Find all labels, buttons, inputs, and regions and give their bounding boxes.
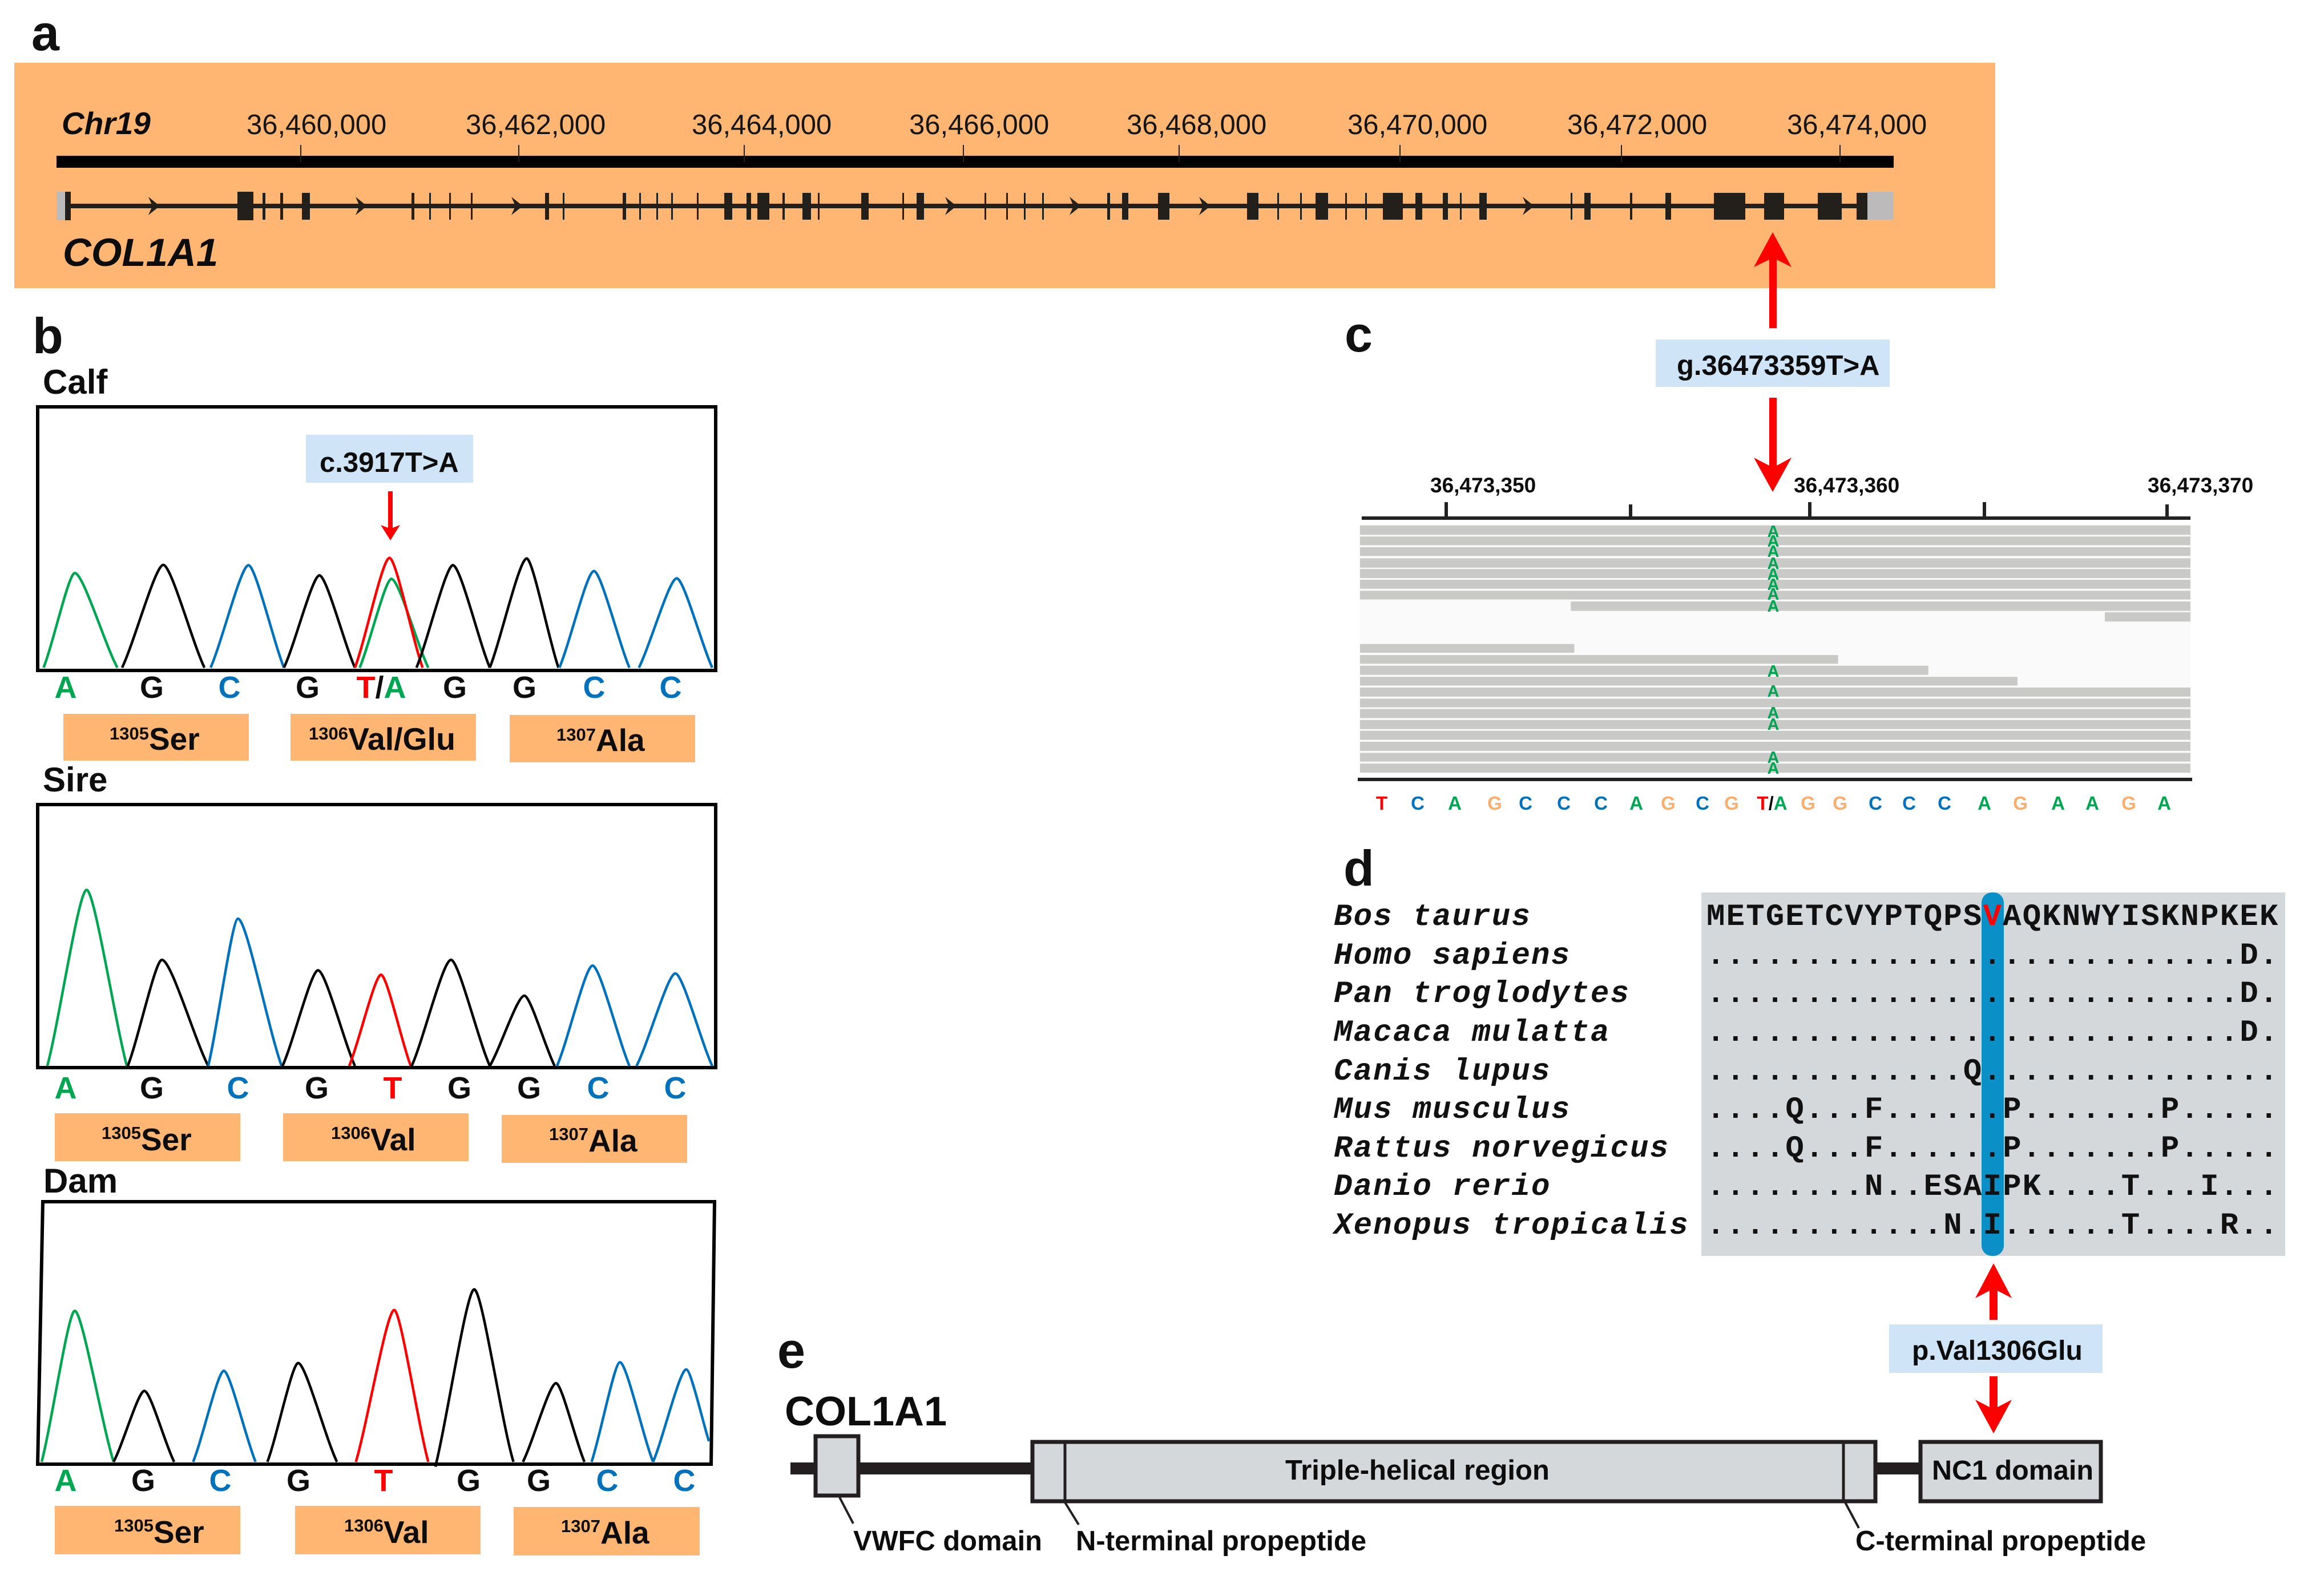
VWFC domain callout xyxy=(840,1497,1042,1557)
pileup axis xyxy=(1362,502,2190,518)
panel letter a: a xyxy=(31,5,60,61)
genomic position labels: 36,466,000 xyxy=(909,110,1049,140)
dam amino acids: Ala xyxy=(600,1515,649,1550)
reference sequence: G xyxy=(1801,793,1815,814)
sire amino acids: 1306 xyxy=(331,1123,370,1143)
reference sequence: T/A xyxy=(1757,793,1788,814)
variant allele marks: A xyxy=(1768,576,1780,594)
dam amino acids: Val xyxy=(384,1514,429,1550)
dam amino acids xyxy=(55,1506,700,1555)
calf amino acids: 1305 xyxy=(110,724,149,743)
calf chromatogram xyxy=(38,363,716,762)
arrow: protein variant to alignment xyxy=(1975,1263,2012,1320)
protein backbone xyxy=(790,1462,1919,1474)
species names xyxy=(1332,900,1689,1243)
reference sequence: C xyxy=(1938,793,1951,814)
panel c: read pileup xyxy=(1345,306,2253,814)
pileup coordinate labels xyxy=(1430,474,2253,497)
species names: Mus musculus xyxy=(1333,1093,1571,1128)
sire base calls xyxy=(55,1071,686,1105)
genomic position labels: 36,468,000 xyxy=(1127,110,1266,140)
pileup bottom rule xyxy=(1358,778,2192,781)
species names: Macaca mulatta xyxy=(1333,1016,1610,1050)
arrow: protein variant to NC1 domain xyxy=(1975,1376,2012,1433)
sire amino acids xyxy=(55,1113,687,1163)
reference sequence: A xyxy=(2085,793,2099,814)
aligned sequences: ...........................D. xyxy=(1706,939,2279,973)
variant allele marks: A xyxy=(1768,565,1780,584)
variant allele marks: A xyxy=(1768,759,1780,778)
dam base calls: C xyxy=(596,1464,619,1498)
calf base calls: A xyxy=(55,670,76,705)
callout: cDNA variant xyxy=(306,435,473,483)
reference sequence xyxy=(1376,793,2171,814)
protein name: COL1A1 xyxy=(785,1389,947,1435)
aligned sequences: ........N..ESAIPK....T...I... xyxy=(1706,1170,2279,1205)
reference sequence: C xyxy=(1696,793,1709,814)
pileup coordinate labels: 36,473,360 xyxy=(1794,474,1899,497)
species names: Rattus norvegicus xyxy=(1334,1132,1669,1166)
calf heading: Calf xyxy=(43,363,108,401)
variant allele marks: A xyxy=(1768,682,1780,701)
reference sequence: A xyxy=(1448,793,1462,814)
sire heading: Sire xyxy=(43,761,107,799)
dam base calls: C xyxy=(209,1464,232,1498)
reference sequence: C xyxy=(1519,793,1532,814)
dam base calls: C xyxy=(673,1464,695,1498)
calf base calls: C xyxy=(660,670,681,705)
C-terminal propeptide callout: C-terminal propeptide xyxy=(1855,1526,2146,1557)
aligned sequences: ....Q...F......P.......P..... xyxy=(1706,1132,2279,1166)
dam traces xyxy=(42,1290,709,1466)
sire base calls: T xyxy=(384,1071,402,1105)
dam base calls: A xyxy=(55,1464,76,1498)
pileup coordinate labels: 36,473,370 xyxy=(2148,474,2253,497)
sire amino acids: Val xyxy=(370,1122,415,1157)
sire trace frame xyxy=(38,805,716,1068)
reference sequence: C xyxy=(1594,793,1608,814)
calf base calls: C xyxy=(218,670,241,705)
triple-helical region box: Triple-helical region xyxy=(1285,1455,1550,1486)
panel e: protein domains xyxy=(777,1322,2146,1557)
arrow: variant peak xyxy=(381,491,400,540)
calf base calls: G xyxy=(140,670,164,705)
reference sequence: A xyxy=(2157,793,2171,814)
dam base calls xyxy=(55,1464,695,1498)
calf traces xyxy=(43,558,712,668)
genomic position labels xyxy=(247,110,1927,140)
sire base calls: C xyxy=(227,1071,249,1105)
sire base calls: G xyxy=(447,1071,471,1105)
arrow: variant to read pileup xyxy=(1754,398,1792,492)
reference sequence: A xyxy=(1629,793,1643,814)
sire amino acids: 1305 xyxy=(102,1123,141,1143)
reference sequence: C xyxy=(1411,793,1425,814)
variant allele marks: A xyxy=(1768,749,1780,767)
dam trace frame xyxy=(38,1202,715,1464)
sire base calls: G xyxy=(305,1071,329,1105)
panel letter d: d xyxy=(1343,840,1374,896)
VWFC domain box xyxy=(816,1436,858,1496)
callout: cDNA variant: c.3917T>A xyxy=(320,447,459,478)
callout: protein variant xyxy=(1889,1324,2103,1373)
calf amino acids xyxy=(63,714,695,762)
gene name: COL1A1 xyxy=(63,231,218,274)
calf base calls: G xyxy=(296,670,320,705)
reference sequence: C xyxy=(1557,793,1571,814)
sire amino acids: 1307 xyxy=(549,1124,588,1144)
reference sequence: G xyxy=(2121,793,2136,814)
variant allele marks: A xyxy=(1768,716,1780,734)
dam amino acids: 1306 xyxy=(344,1516,384,1535)
sire base calls: C xyxy=(587,1071,610,1105)
dam amino acids: 1305 xyxy=(114,1516,154,1535)
C-terminal propeptide callout xyxy=(1845,1502,2146,1557)
reference sequence: G xyxy=(2013,793,2028,814)
calf base calls: G xyxy=(443,670,467,705)
panel letter b: b xyxy=(33,308,63,364)
sire chromatogram xyxy=(38,761,716,1163)
orange background xyxy=(14,63,1995,288)
species names: Danio rerio xyxy=(1334,1170,1551,1205)
pileup coordinate labels: 36,473,350 xyxy=(1430,474,1536,497)
calf amino acids: 1306 xyxy=(309,724,348,743)
dam base calls: G xyxy=(457,1464,481,1498)
callout: genomic variant: g.36473359T>A xyxy=(1677,350,1880,381)
variant allele marks: A xyxy=(1768,585,1780,604)
sire base calls: G xyxy=(140,1071,164,1105)
panel a: gene structure xyxy=(14,5,1995,288)
genomic position labels: 36,472,000 xyxy=(1567,110,1707,140)
reference sequence: G xyxy=(1833,793,1847,814)
genomic position labels: 36,464,000 xyxy=(692,110,832,140)
calf amino acids: 1307 xyxy=(556,725,596,745)
calf amino acids: Ser xyxy=(149,721,200,757)
aligned sequences xyxy=(1706,900,2279,1243)
variant allele marks: A xyxy=(1768,597,1780,616)
reference sequence: G xyxy=(1487,793,1502,814)
species names: Bos taurus xyxy=(1334,900,1531,935)
aligned sequences: ...........................D. xyxy=(1706,1016,2279,1050)
calf amino acids: Ala xyxy=(596,722,645,758)
callout: protein variant: p.Val1306Glu xyxy=(1912,1336,2083,1366)
genomic position labels: 36,470,000 xyxy=(1347,110,1487,140)
species names: Pan troglodytes xyxy=(1334,977,1630,1012)
variant allele marks: A xyxy=(1768,662,1780,681)
genomic position labels: 36,460,000 xyxy=(247,110,386,140)
reference sequence: G xyxy=(1724,793,1739,814)
aligned reads xyxy=(1360,524,2190,774)
variant allele marks: A xyxy=(1768,704,1780,722)
sire base calls: G xyxy=(517,1071,541,1105)
aligned sequences: ....Q...F......P.......P..... xyxy=(1706,1093,2279,1128)
callout: genomic variant xyxy=(1656,340,1890,387)
genomic position labels: 36,474,000 xyxy=(1787,110,1927,140)
aligned sequences: ...........................D. xyxy=(1706,977,2279,1012)
panel b: chromatograms xyxy=(33,308,716,1555)
arrow: gene model to variant xyxy=(1754,232,1792,328)
variant allele marks: A xyxy=(1768,532,1780,551)
sire base calls: C xyxy=(664,1071,686,1105)
calf base calls: G xyxy=(513,670,536,705)
panel letter e: e xyxy=(777,1322,805,1379)
aligned sequences: .............Q............... xyxy=(1706,1054,2279,1089)
dam heading: Dam xyxy=(43,1162,118,1200)
species names: Homo sapiens xyxy=(1334,939,1571,973)
dam base calls: G xyxy=(131,1464,155,1498)
reference sequence: A xyxy=(2051,793,2065,814)
species names: Canis lupus xyxy=(1334,1054,1551,1089)
calf trace frame xyxy=(38,407,716,670)
conserved column highlight xyxy=(1982,892,2004,1256)
genomic position labels: 36,462,000 xyxy=(466,110,606,140)
reference sequence: C xyxy=(1902,793,1916,814)
reference sequence: A xyxy=(1978,793,1991,814)
alignment background xyxy=(1701,892,2285,1256)
calf base calls: C xyxy=(583,670,605,705)
panel letter c: c xyxy=(1345,306,1373,362)
N-terminal propeptide callout xyxy=(1065,1502,1366,1557)
species names: Xenopus tropicalis xyxy=(1332,1209,1689,1243)
variant allele marks: A xyxy=(1768,555,1780,573)
dam base calls: G xyxy=(287,1464,310,1498)
sire amino acids: Ala xyxy=(588,1123,638,1158)
reference sequence: C xyxy=(1869,793,1882,814)
reference sequence: G xyxy=(1661,793,1676,814)
aligned sequences: METGETCVYPTQPSVAQKNWYISKNPKEK xyxy=(1706,900,2279,935)
reference sequence: T xyxy=(1376,793,1387,814)
variant allele marks xyxy=(1768,523,1780,778)
panel d: species alignment xyxy=(1332,840,2285,1256)
NC1 domain box: NC1 domain xyxy=(1932,1455,2093,1486)
calf amino acids: Val/Glu xyxy=(348,721,455,757)
dam base calls: G xyxy=(527,1464,551,1498)
sire base calls: A xyxy=(55,1071,76,1105)
sire amino acids: Ser xyxy=(141,1122,192,1157)
dam amino acids: 1307 xyxy=(561,1516,600,1536)
chromosome ruler bar xyxy=(57,145,1894,168)
N-terminal propeptide callout: N-terminal propeptide xyxy=(1076,1526,1366,1557)
variant allele marks: A xyxy=(1768,523,1780,541)
NC1 domain box xyxy=(1920,1442,2101,1501)
aligned sequences: ............N.I......T....R.. xyxy=(1706,1209,2279,1243)
dam base calls: T xyxy=(374,1464,393,1498)
dam chromatogram xyxy=(38,1162,715,1555)
calf base calls xyxy=(55,670,681,705)
dam amino acids: Ser xyxy=(154,1514,204,1550)
chromosome label: Chr19 xyxy=(62,106,151,141)
VWFC domain callout: VWFC domain xyxy=(853,1526,1042,1557)
COL1A1 gene model with exons xyxy=(57,192,1894,220)
variant allele marks: A xyxy=(1768,543,1780,561)
calf base calls: T/A xyxy=(356,670,406,705)
triple-helical region box xyxy=(1032,1442,1875,1501)
sire traces xyxy=(47,890,712,1066)
